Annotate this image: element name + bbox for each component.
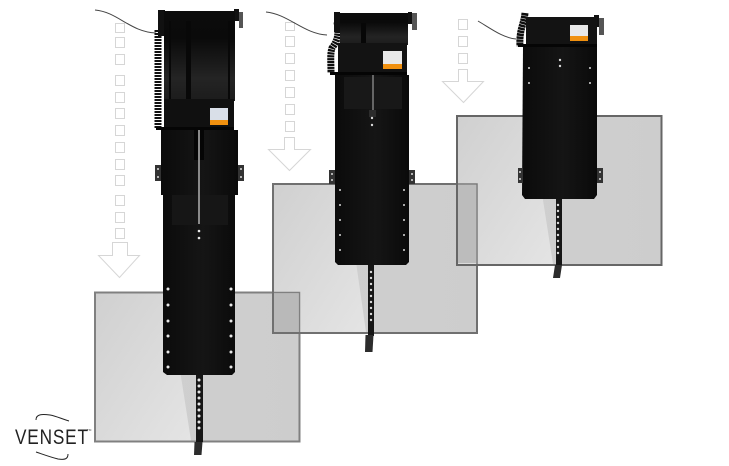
strap (553, 197, 562, 278)
screen 1 (95, 292, 300, 442)
coiled cord (520, 13, 525, 46)
warning label (570, 25, 588, 41)
strap (194, 374, 203, 455)
cable (266, 12, 327, 35)
mounting holes (528, 59, 591, 84)
logo: VENSET (15, 415, 92, 459)
cable (95, 10, 156, 33)
logo lower swoosh (36, 452, 68, 459)
lift 3 (478, 13, 604, 278)
side brackets (518, 168, 603, 183)
mounting holes (166, 230, 232, 368)
shelf (164, 99, 234, 130)
screen 3 (457, 116, 662, 265)
side brackets (155, 165, 244, 181)
top bracket (594, 15, 604, 35)
cable (478, 21, 516, 39)
logo upper swoosh (36, 415, 69, 421)
upper housing (340, 13, 408, 45)
screen 2 (273, 184, 477, 333)
body (522, 47, 597, 199)
dashed arrow: lift 2 travel (268, 22, 310, 170)
shelf (526, 17, 597, 47)
lower housing (335, 75, 409, 265)
logo wordmark: VENSET (15, 427, 88, 449)
lift 2 (266, 12, 417, 352)
coiled cord (331, 22, 338, 73)
lift 1 (95, 9, 244, 455)
mounting holes (339, 117, 405, 251)
warning label (383, 51, 402, 69)
side brackets (329, 170, 415, 184)
top brackets (334, 12, 417, 32)
top brackets (158, 9, 243, 36)
lower housing (161, 130, 238, 375)
upper housing (164, 11, 235, 101)
shelf (338, 43, 407, 75)
coiled cord (154, 30, 162, 129)
logo trademark: TM (87, 428, 92, 432)
warning label (210, 108, 228, 125)
strap (365, 264, 374, 352)
dashed arrow: lift 3 travel (442, 20, 484, 102)
dashed arrow: lift 1 travel (98, 24, 140, 278)
